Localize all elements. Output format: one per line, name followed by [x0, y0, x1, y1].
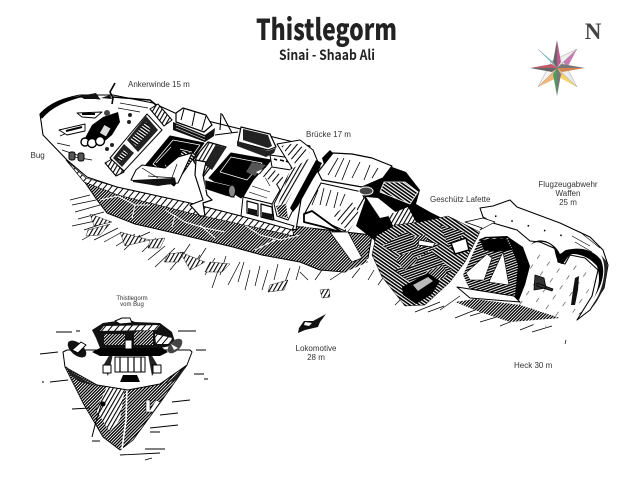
north letter: N	[585, 19, 602, 44]
cargo hold two	[209, 153, 271, 198]
hollow under stern	[483, 236, 530, 300]
stern rail black	[530, 240, 603, 298]
stern deck	[483, 218, 598, 326]
opening black collapse	[356, 167, 446, 262]
mid deck structure	[193, 142, 226, 177]
bridge front windows	[241, 197, 294, 230]
black diagonal gap	[290, 150, 334, 212]
hold two cylinder	[205, 180, 235, 198]
bow rail	[40, 95, 100, 118]
stern top plate	[480, 200, 608, 320]
inset caption: vom Bug	[120, 302, 144, 308]
deck box	[238, 127, 276, 150]
labels: 28 m	[307, 353, 325, 362]
anchor winch	[81, 110, 132, 151]
bridge equipment box	[270, 155, 292, 170]
bridge back deck	[243, 170, 280, 204]
inset caption: Thistlegorm	[116, 296, 148, 302]
hatched recess	[333, 202, 360, 232]
labels	[30, 80, 598, 370]
tarpaulin sheet	[131, 153, 192, 185]
crate tanks	[176, 108, 212, 132]
icon: compass rose	[530, 40, 585, 96]
labels: Bug	[30, 151, 45, 160]
mid hull break plates	[318, 153, 392, 187]
anchor chain mark	[110, 83, 115, 104]
bollards	[69, 152, 84, 161]
labels: 25 m	[559, 198, 577, 207]
gun mount block	[451, 238, 469, 254]
inset superstructure	[92, 346, 168, 356]
bridge tower	[274, 140, 320, 220]
labels: Ankerwinde 15 m	[128, 80, 190, 89]
stern guns	[534, 275, 553, 291]
derrick mast	[215, 113, 238, 135]
hull cracks	[100, 196, 300, 250]
labels: Lokomotive	[296, 344, 337, 353]
ship wreck: main view	[40, 83, 608, 344]
inset caption	[116, 296, 148, 308]
anchor winch plates	[59, 112, 102, 135]
crane post	[190, 160, 212, 216]
deck side band	[66, 160, 294, 236]
labels: Heck 30 m	[514, 361, 553, 370]
inset water lines	[40, 331, 208, 460]
sea bed scratches under bow	[70, 195, 585, 344]
subtitle: Sinai - Shaab Ali	[279, 45, 375, 65]
hull side hatching	[84, 181, 372, 272]
grating	[105, 104, 172, 176]
ship bow view inset	[40, 318, 208, 460]
deck lines	[57, 103, 148, 160]
icon: locomotive wreck	[298, 314, 326, 333]
labels: Geschütz Lafette	[430, 195, 491, 204]
labels: Flugzeugabwehr	[538, 180, 598, 189]
cargo hold one	[146, 136, 204, 186]
inset deck	[63, 350, 192, 390]
labels: Waffen	[556, 189, 580, 198]
foredeck	[40, 95, 310, 230]
forward hatch	[110, 114, 162, 171]
inset winch	[103, 354, 158, 376]
title: Thistlegorm	[256, 7, 397, 49]
inset side tanks	[65, 337, 89, 361]
inset hull	[65, 365, 187, 450]
labels: Brücke 17 m	[306, 130, 351, 139]
debris field	[372, 216, 480, 306]
locomotive crate in debris	[402, 273, 440, 304]
